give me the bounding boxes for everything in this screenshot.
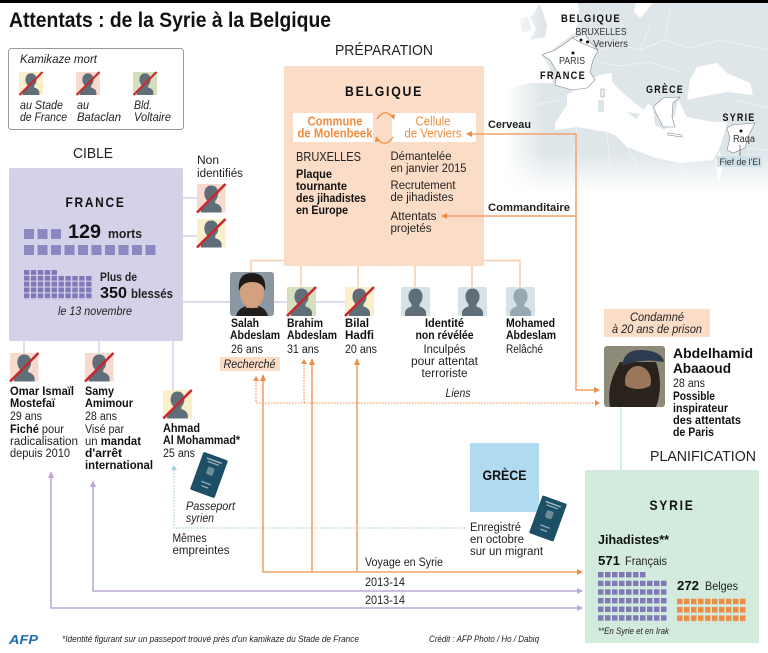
panel: Syrie: **En Syrie et en Irak <box>598 626 669 636</box>
panel: Syrie <box>585 470 759 643</box>
map of Europe and the Mediterranean: Fief de l'EI <box>720 157 760 168</box>
map of Europe and the Mediterranean: BELGIQUE <box>561 13 621 25</box>
panel: Grèce: sur un migrant <box>470 546 544 558</box>
text: Abdelhamid Abaaoud: de Paris <box>673 427 714 439</box>
connector lines from Belgique <box>251 260 520 287</box>
legend: kamikaze mort: Bataclan <box>77 112 121 124</box>
text: Mohamed Abdeslam <box>506 318 556 356</box>
text: identité non révélée: Inculpés <box>424 344 466 356</box>
panel: Syrie: Français <box>625 554 667 568</box>
photo: Salah Abdeslam <box>230 272 274 316</box>
text: Abdelhamid Abaaoud: 28 ans <box>673 378 705 390</box>
text: Bilal Hadfi: Hadfi <box>345 330 374 342</box>
non identifiés: identifiés <box>197 168 243 180</box>
arrow: liens: Liens <box>446 388 471 400</box>
icon: passeport syrien: syrien <box>186 513 214 525</box>
map of Europe and the Mediterranean: BRUXELLES <box>576 27 627 38</box>
heading: planification: PLANIFICATION <box>650 448 756 465</box>
panel: France: 350 <box>100 285 127 302</box>
panel: Syrie: Jihadistes** <box>598 532 670 547</box>
panel: Syrie: Belges <box>705 579 738 593</box>
panel: Belgique: tournante <box>296 181 347 193</box>
legend: kamikaze mort: de France <box>20 112 67 124</box>
icon and text: Samy Amimour: Amimour <box>85 398 133 410</box>
legend: kamikaze mort: Bld. <box>134 100 152 112</box>
text: Salah Abdeslam: Recherché <box>224 359 276 371</box>
non identifiés: Non <box>197 155 219 167</box>
map of Europe and the Mediterranean: PARIS <box>559 56 585 67</box>
heading: cible: CIBLE <box>73 145 113 162</box>
heading: préparation: PRÉPARATION <box>335 42 433 59</box>
arrows: voyage en Syrie <box>260 358 583 575</box>
text: Brahim Abdeslam: Brahim <box>287 318 323 330</box>
text: Salah Abdeslam <box>220 318 280 371</box>
arrow: Omar Ismaïl Mostefaï 2013-14: 2013-14 <box>365 595 406 607</box>
arrow: Omar Ismaïl Mostefaï 2013-14 <box>48 471 583 611</box>
text: identité non révélée: non révélée <box>416 330 474 342</box>
text: identité non révélée: terroriste <box>422 368 468 380</box>
text: Abdelhamid Abaaoud: Abaaoud <box>673 360 731 376</box>
text: identité non révélée: Identité <box>425 318 464 330</box>
arrow: commanditaire <box>441 202 576 219</box>
legend: kamikaze mort: Voltaire <box>134 112 171 124</box>
text: Brahim Abdeslam: 31 ans <box>287 344 319 356</box>
icon: passeport syrien <box>186 452 236 525</box>
icon and text: Omar Ismaïl Mostefaï: Omar Ismaïl <box>10 386 74 398</box>
arrow: commanditaire: Commanditaire <box>488 202 570 214</box>
icon and text: Omar Ismaïl Mostefaï: Mostefaï <box>10 398 56 410</box>
icon and text: Omar Ismaïl Mostefaï: Fiché pour <box>10 424 64 436</box>
text: Mohamed Abdeslam: Relâché <box>506 344 543 356</box>
map of Europe and the Mediterranean <box>505 3 768 193</box>
arrow: Samy Amimour 2013-14: 2013-14 <box>365 577 406 589</box>
legend: kamikaze mort: au Stade <box>20 100 63 112</box>
text: Abdelhamid Abaaoud <box>673 345 753 439</box>
panel: Belgique: Cellule <box>416 114 450 128</box>
map of Europe and the Mediterranean: FRANCE <box>540 70 586 82</box>
icon and text: Samy Amimour: 28 ans <box>85 411 117 423</box>
panel: Grèce: GRÈCE <box>482 467 526 483</box>
non identifiés <box>197 155 243 248</box>
panel: France: blessés <box>131 287 173 301</box>
icon and text: Samy Amimour: Visé par <box>85 424 124 436</box>
icon and text: Samy Amimour: un mandat <box>85 436 141 448</box>
icon and text: Samy Amimour: d'arrêt <box>85 448 122 460</box>
icon and text: Omar Ismaïl Mostefaï: 29 ans <box>10 411 42 423</box>
text: Bilal Hadfi: Bilal <box>345 318 369 330</box>
panel: Belgique: projetés <box>390 223 432 235</box>
arrows: voyage en Syrie: Voyage en Syrie <box>365 557 443 569</box>
connector line Abaaoud to Syrie <box>620 407 622 470</box>
legend: kamikaze mort <box>8 48 184 130</box>
panel: Belgique: Démantelée <box>390 151 452 163</box>
panel: Syrie: 571 <box>598 553 620 568</box>
footnote: *Identité figurant sur un passeport trouvé près d'un kamikaze du Stade de France <box>62 634 359 644</box>
photo: Abdelhamid Abaaoud <box>604 346 665 407</box>
arrow: cerveau: Cerveau <box>488 119 531 131</box>
connector lines from France <box>24 198 345 390</box>
panel: Belgique: de jihadistes <box>390 192 454 204</box>
arrow: mêmes empreintes <box>171 465 465 557</box>
panel: Belgique: Attentats <box>390 211 437 223</box>
text: Mohamed Abdeslam: Abdeslam <box>506 330 556 342</box>
text: Salah Abdeslam: 26 ans <box>231 344 263 356</box>
arrow: liens <box>253 359 600 406</box>
icon and text: Ahmad Al Mohammad: Ahmad <box>163 423 200 435</box>
icon: Brahim Abdeslam <box>287 287 316 316</box>
icon and text: Omar Ismaïl Mostefaï <box>10 353 78 460</box>
text: Bilal Hadfi <box>345 318 377 356</box>
panel: Grèce: en octobre <box>470 534 524 546</box>
panel: France: FRANCE <box>66 194 126 210</box>
arrow: cerveau <box>466 119 600 393</box>
arrow: Samy Amimour 2013-14 <box>90 480 583 594</box>
text: Mohamed Abdeslam: Mohamed <box>506 318 555 330</box>
panel: Belgique: Recrutement <box>390 180 456 192</box>
panel: Belgique: BELGIQUE <box>345 83 423 99</box>
text: Abdelhamid Abaaoud: des attentats <box>673 415 741 427</box>
icon: Bilal Hadfi <box>345 287 374 316</box>
text: Brahim Abdeslam: Abdeslam <box>287 330 337 342</box>
panel: France: 129 <box>68 222 101 243</box>
icon: Mohamed Abdeslam <box>506 287 535 316</box>
panel: France: Plus de <box>100 270 137 284</box>
panel: France: morts <box>108 226 142 241</box>
arrow: mêmes empreintes: empreintes <box>172 545 230 557</box>
legend: kamikaze mort: au <box>77 100 90 112</box>
panel: Syrie: 272 <box>677 578 699 593</box>
icon and text: Ahmad Al Mohammad: 25 ans <box>163 448 195 460</box>
text: identité non révélée: pour attentat <box>411 356 479 368</box>
icon and text: Samy Amimour <box>85 353 153 472</box>
panel: Belgique: en janvier 2015 <box>390 163 466 175</box>
text: Abdelhamid Abaaoud: inspirateur <box>673 403 728 415</box>
panel: Belgique: des jihadistes <box>296 193 366 205</box>
panel: Belgique: BRUXELLES <box>296 149 361 164</box>
panel: Belgique: de Verviers <box>404 126 462 140</box>
text: identité non révélée <box>411 318 479 380</box>
icon and text: Omar Ismaïl Mostefaï: depuis 2010 <box>10 448 70 460</box>
panel: Belgique: en Europe <box>296 205 348 217</box>
AFP logo: AFP <box>8 632 38 647</box>
icon and text: Omar Ismaïl Mostefaï: radicalisation <box>10 436 78 448</box>
map of Europe and the Mediterranean: GRÈCE <box>646 83 684 96</box>
text: Abdelhamid Abaaoud: Abdelhamid <box>673 345 753 361</box>
panel: Belgique <box>284 66 484 266</box>
callout: condamné: Condamné <box>630 312 684 324</box>
icon and text: Ahmad Al Mohammad: Al Mohammad* <box>163 435 240 447</box>
icon: passeport syrien: Passeport <box>186 501 236 513</box>
panel: Syrie: SYRIE <box>650 497 694 513</box>
panel: Belgique: Plaque <box>296 169 332 181</box>
icon and text: Samy Amimour: Samy <box>85 386 115 398</box>
title: Attentats : de la Syrie à la Belgique <box>9 9 331 32</box>
panel: Grèce: Enregistré <box>470 522 521 534</box>
panel: Belgique: de Molenbeek <box>298 126 373 140</box>
text: Salah Abdeslam: Salah <box>231 318 259 330</box>
panel: France <box>9 168 183 341</box>
top black bar <box>0 0 768 3</box>
map of Europe and the Mediterranean: Verviers <box>593 39 628 50</box>
panel: Grèce <box>470 443 567 558</box>
map of Europe and the Mediterranean: Raqa <box>733 134 755 145</box>
icon and text: Samy Amimour: international <box>85 460 153 472</box>
text: Bilal Hadfi: 20 ans <box>345 344 377 356</box>
icon: identité non révélée 2 <box>458 287 487 316</box>
text: Brahim Abdeslam <box>287 318 337 356</box>
arrow: mêmes empreintes: Mêmes <box>172 533 207 545</box>
panel: France: le 13 novembre <box>58 306 132 318</box>
credit: Crédit : AFP Photo / Ho / Dabiq <box>429 634 539 644</box>
legend: kamikaze mort: Kamikaze mort <box>20 54 98 66</box>
text: Abdelhamid Abaaoud: Possible <box>673 391 715 403</box>
text: Salah Abdeslam: Abdeslam <box>230 330 280 342</box>
icon: identité non révélée 1 <box>401 287 430 316</box>
callout: condamné <box>604 309 710 337</box>
icon and text: Ahmad Al Mohammad <box>163 390 240 460</box>
map of Europe and the Mediterranean: SYRIE <box>722 112 756 124</box>
panel: Belgique: Commune <box>308 114 362 128</box>
callout: condamné: à 20 ans de prison <box>612 324 702 336</box>
